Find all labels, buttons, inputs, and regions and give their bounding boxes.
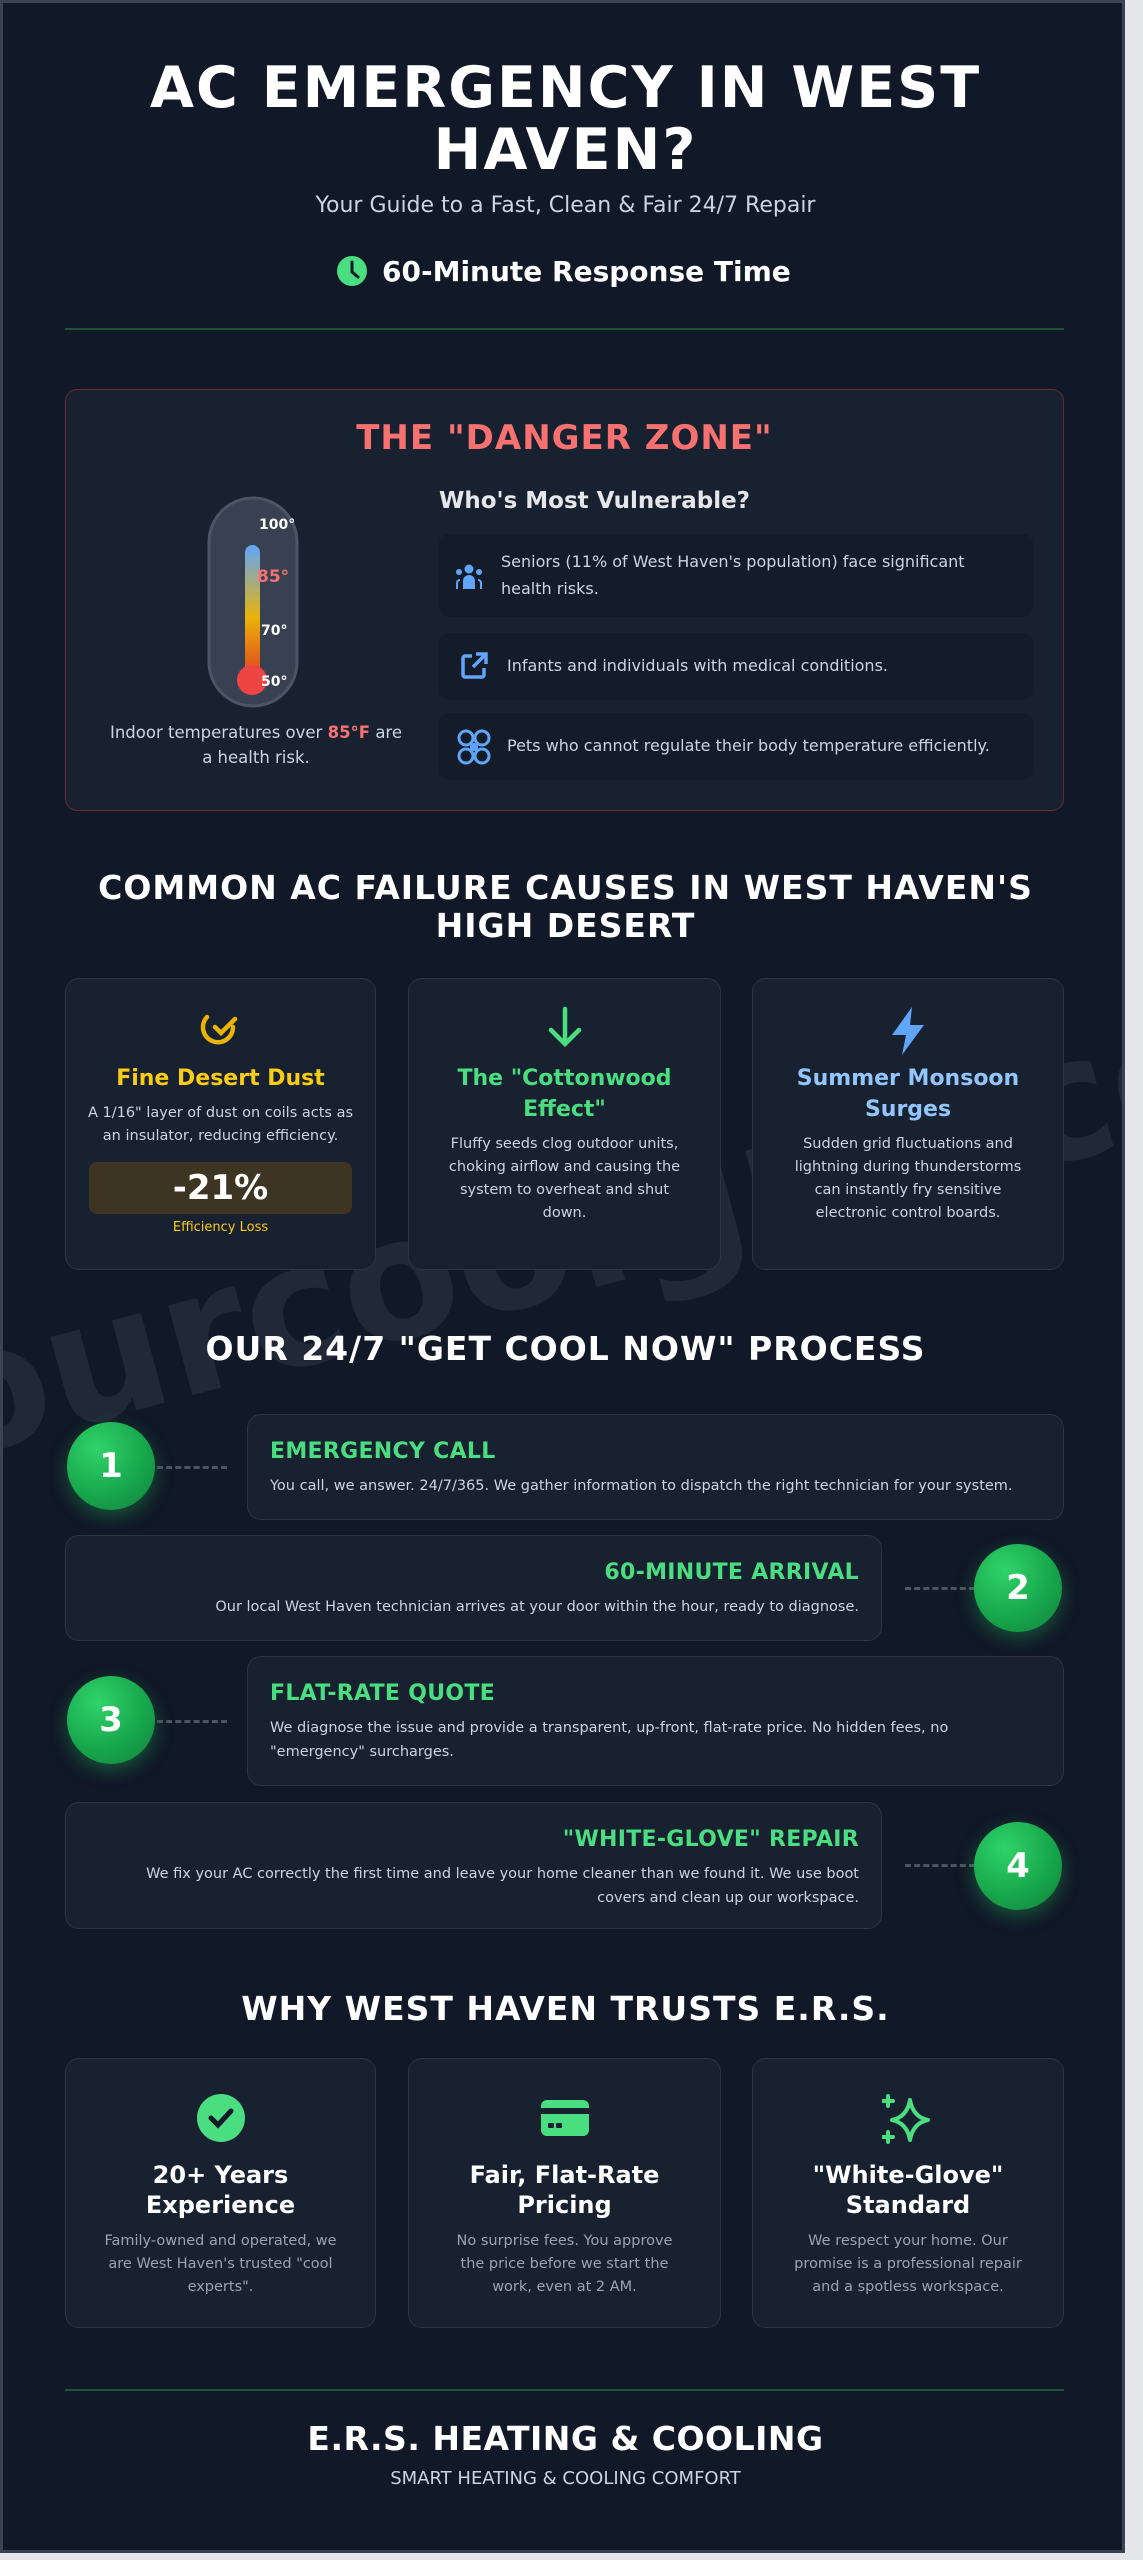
heading: who's most vulnerable: Who's Most Vulnerable? bbox=[439, 488, 750, 514]
title: AC EMERGENCY IN WEST bbox=[150, 55, 981, 121]
footer: tagline: SMART HEATING & COOLING COMFORT bbox=[390, 2468, 741, 2489]
icon: card bbox=[541, 2100, 589, 2136]
card: desert dust: A 1/16" layer of dust on coils acts as an insulator, reducing efficiency. bbox=[88, 1105, 353, 1144]
heading: failure causes: COMMON AC FAILURE CAUSES IN WEST HAVEN'S bbox=[98, 868, 1033, 907]
step 2: 2 bbox=[1006, 1568, 1030, 1608]
card: monsoon bbox=[752, 978, 1064, 1270]
response time badge: 60-Minute Response Time bbox=[382, 254, 791, 288]
card: cottonwood: Fluffy seeds clog outdoor units, choking airflow and causing the system to overheat and shut down. bbox=[449, 1136, 680, 1221]
heading: why trust: WHY WEST HAVEN TRUSTS E.R.S. bbox=[241, 1989, 890, 2028]
card: pricing: No surprise fees. You approve the price before we start the work, even at 2 AM. bbox=[457, 2233, 672, 2295]
card: white glove bbox=[752, 2058, 1064, 2328]
icon: dust swirl bbox=[200, 1014, 238, 1044]
step 3: We diagnose the issue and provide a transparent, up-front, flat-rate price. No hidden fees, no "emergency" surcharges. bbox=[270, 1720, 948, 1760]
panel: danger zone bbox=[65, 389, 1064, 811]
card: experience bbox=[65, 2058, 376, 2328]
card: white glove: "White-Glove" Standard bbox=[813, 2161, 1003, 2219]
thermometer: 50° bbox=[261, 674, 287, 690]
icon: paw/fan bbox=[458, 730, 490, 764]
step 4: 4 bbox=[1006, 1846, 1030, 1886]
subtitle: Your Guide to a Fast, Clean & Fair 24/7 Repair bbox=[316, 193, 815, 218]
card: cottonwood bbox=[408, 978, 721, 1270]
heading: danger zone: THE "DANGER ZONE" bbox=[356, 418, 773, 458]
step 4: We fix your AC correctly the first time and leave your home cleaner than we found it. We use boot covers and clean up our workspace. bbox=[146, 1866, 859, 1906]
item: pets: Pets who cannot regulate their body temperature efficiently. bbox=[507, 736, 990, 755]
icon: external link bbox=[461, 652, 488, 679]
card: monsoon: Summer Monsoon Surges bbox=[797, 1066, 1019, 1122]
icon: lightning bbox=[892, 1007, 924, 1055]
thermometer: 70° bbox=[261, 623, 287, 639]
step 4: "WHITE-GLOVE" REPAIR bbox=[563, 1827, 859, 1852]
step 3 bbox=[59, 1656, 1064, 1786]
item: infants: Infants and individuals with medical conditions. bbox=[507, 656, 888, 675]
stat: -21% bbox=[89, 1162, 352, 1214]
heading: failure causes bbox=[98, 868, 1033, 945]
title: HAVEN? bbox=[434, 117, 697, 183]
heading: failure causes: HIGH DESERT bbox=[436, 906, 695, 945]
card: monsoon: Sudden grid fluctuations and lightning during thunderstorms can instantly fry sensitive electronic control boards. bbox=[795, 1136, 1021, 1221]
step 1: 1 bbox=[99, 1446, 123, 1486]
thermometer: 85° bbox=[257, 567, 289, 587]
heading: process: OUR 24/7 "GET COOL NOW" PROCESS bbox=[205, 1329, 926, 1368]
step 4 bbox=[65, 1802, 1070, 1929]
step 2 bbox=[65, 1535, 1070, 1646]
card: desert dust bbox=[65, 978, 376, 1270]
card: desert dust: Efficiency Loss bbox=[173, 1220, 268, 1235]
card: experience: Family-owned and operated, we are West Haven's trusted "cool experts". bbox=[104, 2233, 337, 2295]
item: seniors: Seniors (11% of West Haven's population) face significant health risks. bbox=[501, 552, 965, 598]
icon: check bbox=[197, 2094, 245, 2142]
card: pricing: Fair, Flat-Rate Pricing bbox=[470, 2161, 659, 2219]
thermometer bbox=[208, 496, 298, 708]
card: desert dust: Fine Desert Dust bbox=[116, 1066, 325, 1091]
caption: 85F risk: Indoor temperatures over 85°F are a health risk. bbox=[110, 723, 402, 767]
step 2: 60-MINUTE ARRIVAL bbox=[604, 1560, 859, 1585]
thermometer: 100° bbox=[259, 517, 295, 533]
step 1: You call, we answer. 24/7/365. We gather information to dispatch the right technician for your system. bbox=[270, 1478, 1013, 1494]
card: cottonwood: The "Cottonwood Effect" bbox=[457, 1066, 672, 1122]
card: white glove: We respect your home. Our promise is a professional repair and a spotless workspace. bbox=[794, 2233, 1022, 2295]
icon: arrow down bbox=[548, 1006, 582, 1047]
step 1 bbox=[59, 1414, 1064, 1524]
icon: sparkles bbox=[882, 2094, 930, 2144]
step 3: 3 bbox=[99, 1700, 123, 1740]
card: experience: 20+ Years Experience bbox=[146, 2161, 295, 2219]
icon: clock bbox=[337, 256, 367, 286]
item: pets bbox=[439, 713, 1033, 780]
step 1: EMERGENCY CALL bbox=[270, 1439, 496, 1464]
card: pricing bbox=[408, 2058, 721, 2328]
step 3: FLAT-RATE QUOTE bbox=[270, 1681, 495, 1706]
item: seniors bbox=[439, 534, 1033, 617]
step 2: Our local West Haven technician arrives at your door within the hour, ready to diagnose. bbox=[215, 1599, 859, 1615]
item: infants bbox=[439, 633, 1033, 700]
stat: -21%: -21% bbox=[173, 1168, 268, 1208]
footer: company name: E.R.S. HEATING & COOLING bbox=[307, 2419, 824, 2458]
title bbox=[150, 55, 981, 183]
icon: group bbox=[456, 564, 482, 589]
